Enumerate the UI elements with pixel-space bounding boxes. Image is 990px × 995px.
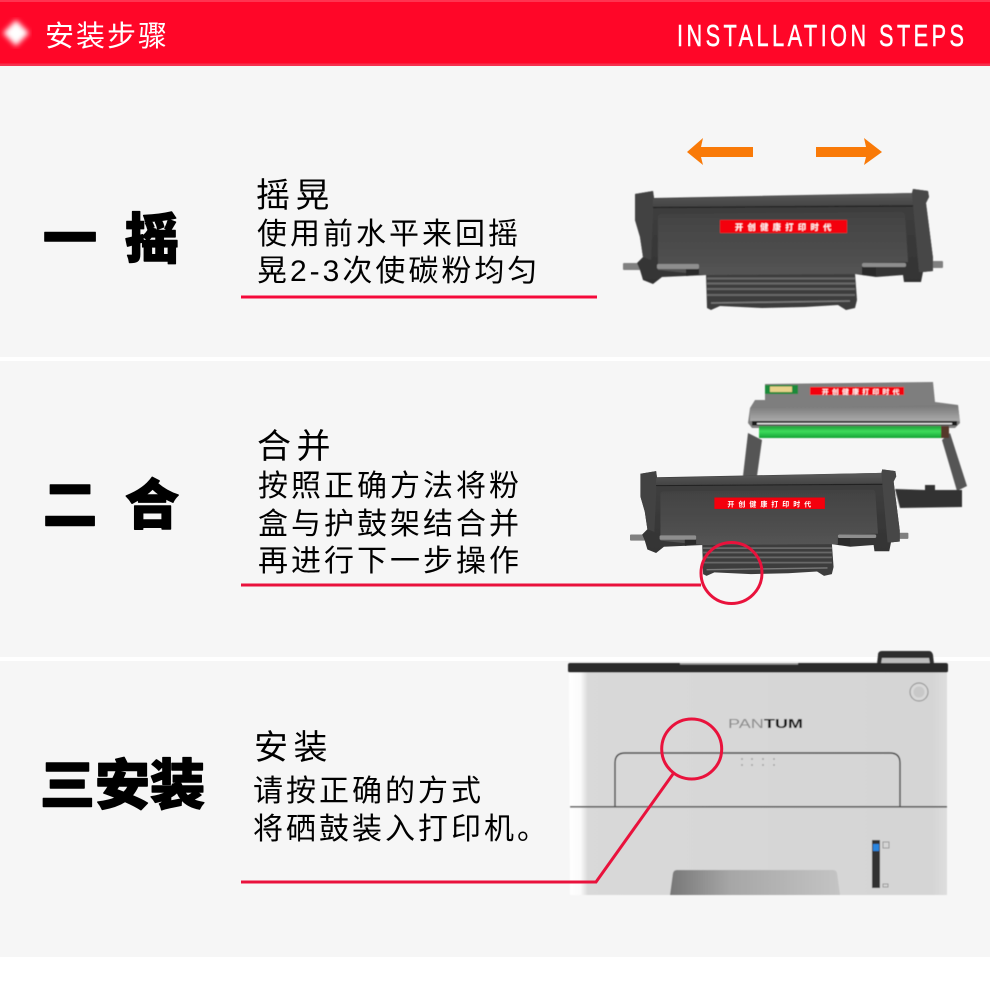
- red label: 开创健康打印时代: [735, 222, 836, 232]
- step one text block: [256, 177, 540, 288]
- step one big label: 一: [43, 210, 97, 270]
- step one description: 使用前水平来回摇: [257, 218, 521, 251]
- indicator dots: [741, 758, 775, 766]
- step two description: 按照正确方法将粉: [258, 470, 522, 503]
- header title: 安装步骤: [45, 20, 169, 53]
- step one red underline: [241, 296, 597, 298]
- drum unit: [743, 382, 967, 508]
- panel: step three background: [0, 661, 990, 957]
- arrow: left: [687, 138, 753, 165]
- step three big label: 三安装: [40, 756, 205, 816]
- logo: PAN TUM: [728, 717, 803, 731]
- panel: step two background: [0, 361, 990, 657]
- step two text block: [257, 428, 522, 578]
- red label: 开创健康打印时代: [822, 387, 903, 396]
- step three callout line and circle: [241, 719, 722, 882]
- step two description: 再进行下一步操作: [258, 545, 522, 578]
- circuit chip: [765, 385, 798, 394]
- power button: [910, 683, 928, 701]
- step two description: 盒与护鼓架结合并: [258, 508, 522, 541]
- step three heading: 安装: [254, 729, 333, 767]
- step one description: 晃2-3次使碳粉均匀: [257, 255, 540, 288]
- step one heading: 摇晃: [256, 177, 335, 215]
- paper gauge: [872, 840, 889, 888]
- red label: 开创健康打印时代: [727, 499, 815, 508]
- step three description: 请按正确的方式: [253, 775, 484, 808]
- step two callout line and circle: [241, 542, 762, 604]
- step two big label: 二: [43, 476, 97, 536]
- red label: [720, 220, 847, 233]
- header bar: [0, 0, 990, 66]
- red label: [714, 498, 825, 509]
- printer: [568, 651, 948, 895]
- step three text block: [253, 729, 550, 846]
- top cover: [568, 663, 948, 672]
- toner cartridge: [623, 189, 943, 310]
- header subtitle: INSTALLATION STEPS: [677, 18, 964, 53]
- panel: step one background: [0, 66, 990, 357]
- paper support handle: [877, 651, 934, 664]
- step two big label: 合: [125, 476, 179, 536]
- step three description: 将硒鼓装入打印机。: [253, 813, 550, 846]
- toner cartridge merged: [630, 469, 908, 576]
- arrow: right: [816, 138, 882, 165]
- step two heading: 合并: [257, 428, 336, 466]
- paper output slot: [670, 870, 840, 895]
- step one big label: 摇: [125, 210, 179, 270]
- icon: glowing diamond: [3, 20, 29, 46]
- front cover outline: [615, 753, 900, 806]
- red label: [810, 387, 904, 396]
